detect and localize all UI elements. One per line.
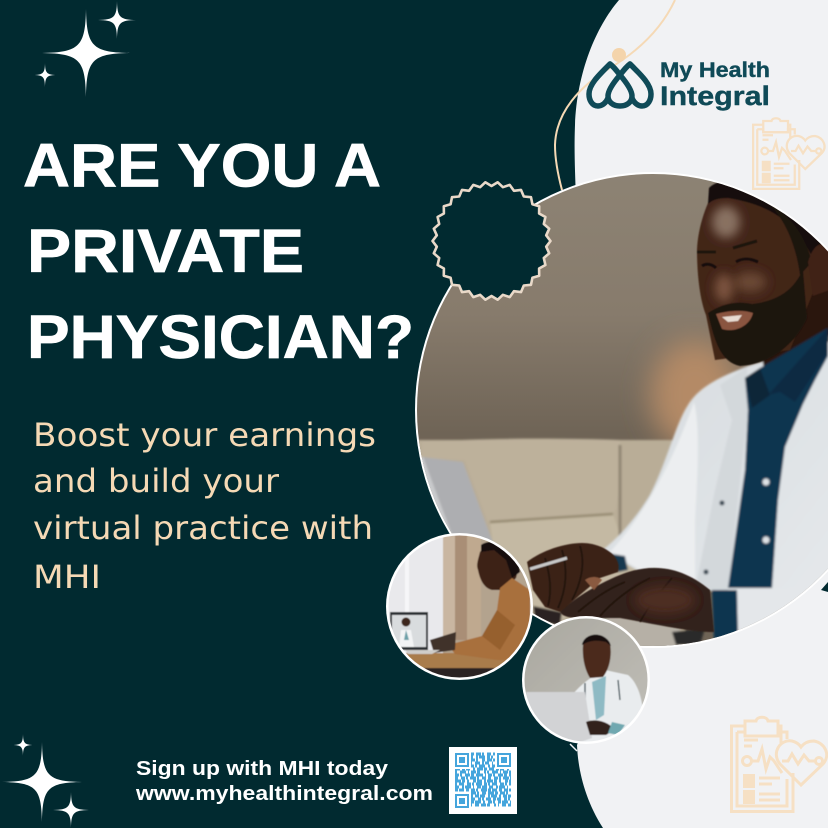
subheading text: and build your (33, 462, 280, 500)
call to action text: www.myhealthintegral.com (135, 783, 433, 805)
dark notch at right edge (821, 582, 828, 592)
main photo: doctor at laptop (415, 170, 828, 660)
light panel: upper right (575, 0, 828, 330)
scalloped dark circle badge (432, 182, 550, 300)
small photo: doctor with stethoscope (520, 615, 655, 745)
call to action text: Sign up with MHI today (136, 758, 389, 780)
subheading text (33, 416, 376, 596)
doctor head (697, 190, 822, 360)
subheading text: Boost your earnings (33, 416, 376, 454)
call to action text (135, 758, 433, 805)
sparkles: bottom left (2, 734, 89, 828)
small white line near lower photo (570, 744, 577, 751)
title: PRIVATE (27, 217, 304, 285)
logo: My Health Integral: Integral (660, 81, 770, 111)
title (23, 132, 414, 371)
sparkles: top left (33, 1, 136, 97)
light panel: lower right (577, 555, 828, 828)
logo icon (589, 64, 651, 106)
small photo: patient on video call (385, 530, 535, 685)
QR code (449, 747, 517, 814)
logo: My Health Integral (589, 59, 770, 111)
subheading text: MHI (33, 558, 101, 596)
icon: clipboard and heart, top (753, 118, 825, 189)
icon: clipboard and heart, bottom (732, 717, 827, 812)
logo text: My Health (660, 59, 770, 82)
peach curved line (555, 0, 675, 190)
subheading text: virtual practice with (33, 509, 373, 547)
title: PHYSICIAN? (27, 303, 414, 371)
title: ARE YOU A (23, 132, 381, 200)
peach dot (612, 48, 626, 62)
